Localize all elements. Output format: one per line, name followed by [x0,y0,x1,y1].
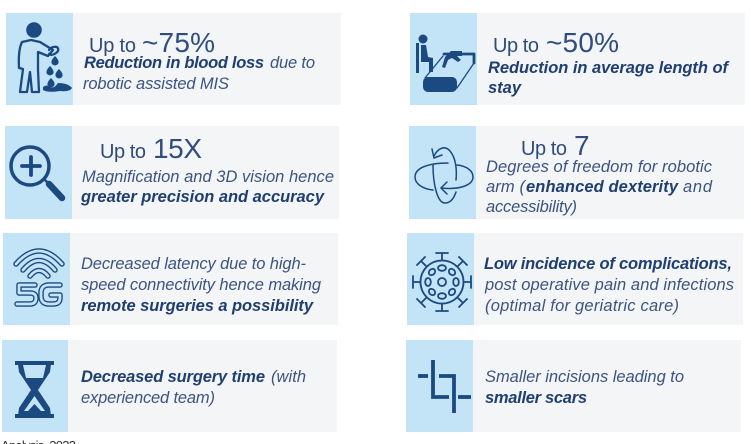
icon: virus [413,253,471,311]
text: incisions description: smaller scars [485,389,587,407]
icon: magnifying glass [11,147,62,198]
text: surgery time description: experienced team) [81,389,215,407]
text: latency description: remote surgeries a possibility [81,297,314,315]
text: degrees of freedom description: and [683,178,713,196]
text: length of stay description: Reduction in average length of [488,59,730,77]
panel: latency [3,233,338,325]
text: magnification description [80,168,334,206]
text: complications description: Low incidence of complications, [484,255,732,273]
text: complications description [484,255,734,315]
panel: blood loss [6,13,341,105]
stat: up to 7: Up to [521,138,567,160]
text: complications description: (optimal for geriatric care) [485,297,679,315]
panel: incisions [406,340,741,432]
stat: up to 75%: ~75% [142,27,215,58]
text: degrees of freedom description [486,158,713,216]
icon: incision marks [418,360,471,413]
text: surgery time description: (with [271,368,306,386]
text: magnification description: greater precision and accuracy [80,188,325,206]
text: blood loss description: Reduction in blood loss [84,54,264,72]
text: latency description: speed connectivity hence making [81,276,322,294]
text: degrees of freedom description: enhanced dexterity [526,178,679,196]
text: latency description [81,255,322,315]
text: latency description: Decreased latency due to high- [81,255,306,273]
text: degrees of freedom description: accessibility) [486,198,577,216]
text: degrees of freedom description: Degrees of freedom for robotic [486,158,713,176]
stat: up to 15X: 15X [153,133,202,164]
icon: person with blood drops [19,22,72,92]
icon: 5G signal [16,251,62,304]
text: blood loss description [83,54,315,93]
stat: up to 15X [100,133,202,164]
text: blood loss description: robotic assisted MIS [83,75,229,93]
stat: up to 7 [521,130,590,161]
stat: up to 50% [493,27,619,58]
text: magnification description: Magnification and 3D vision hence [82,168,334,186]
icon: rotation arrows [415,148,473,203]
stat: up to 75%: Up to [89,35,136,57]
text: incisions description [485,368,684,407]
text: length of stay description [488,59,730,97]
text: degrees of freedom description: arm ( [486,178,526,196]
panel: magnification [5,126,339,219]
panel: length of stay [410,13,745,105]
panel: surgery time [2,340,337,432]
stat: up to 7: 7 [574,130,590,161]
panel: degrees of freedom [409,126,744,219]
icon: patient in bed with visitor [416,34,474,92]
text: complications description: post operative pain and infections [484,276,734,294]
text: length of stay description: stay [488,79,522,97]
stat: up to 50%: Up to [493,35,539,57]
text: surgery time description: Decreased surgery time [81,368,265,386]
icon: hourglass [15,361,54,418]
text: incisions description: Smaller incisions leading to [485,368,684,386]
stat: up to 15X: Up to [100,141,146,163]
text: surgery time description [81,368,306,407]
text: blood loss description: due to [270,54,315,72]
panel: complications [407,233,743,325]
stat: up to 75% [89,27,215,58]
stat: up to 50%: ~50% [546,27,619,58]
